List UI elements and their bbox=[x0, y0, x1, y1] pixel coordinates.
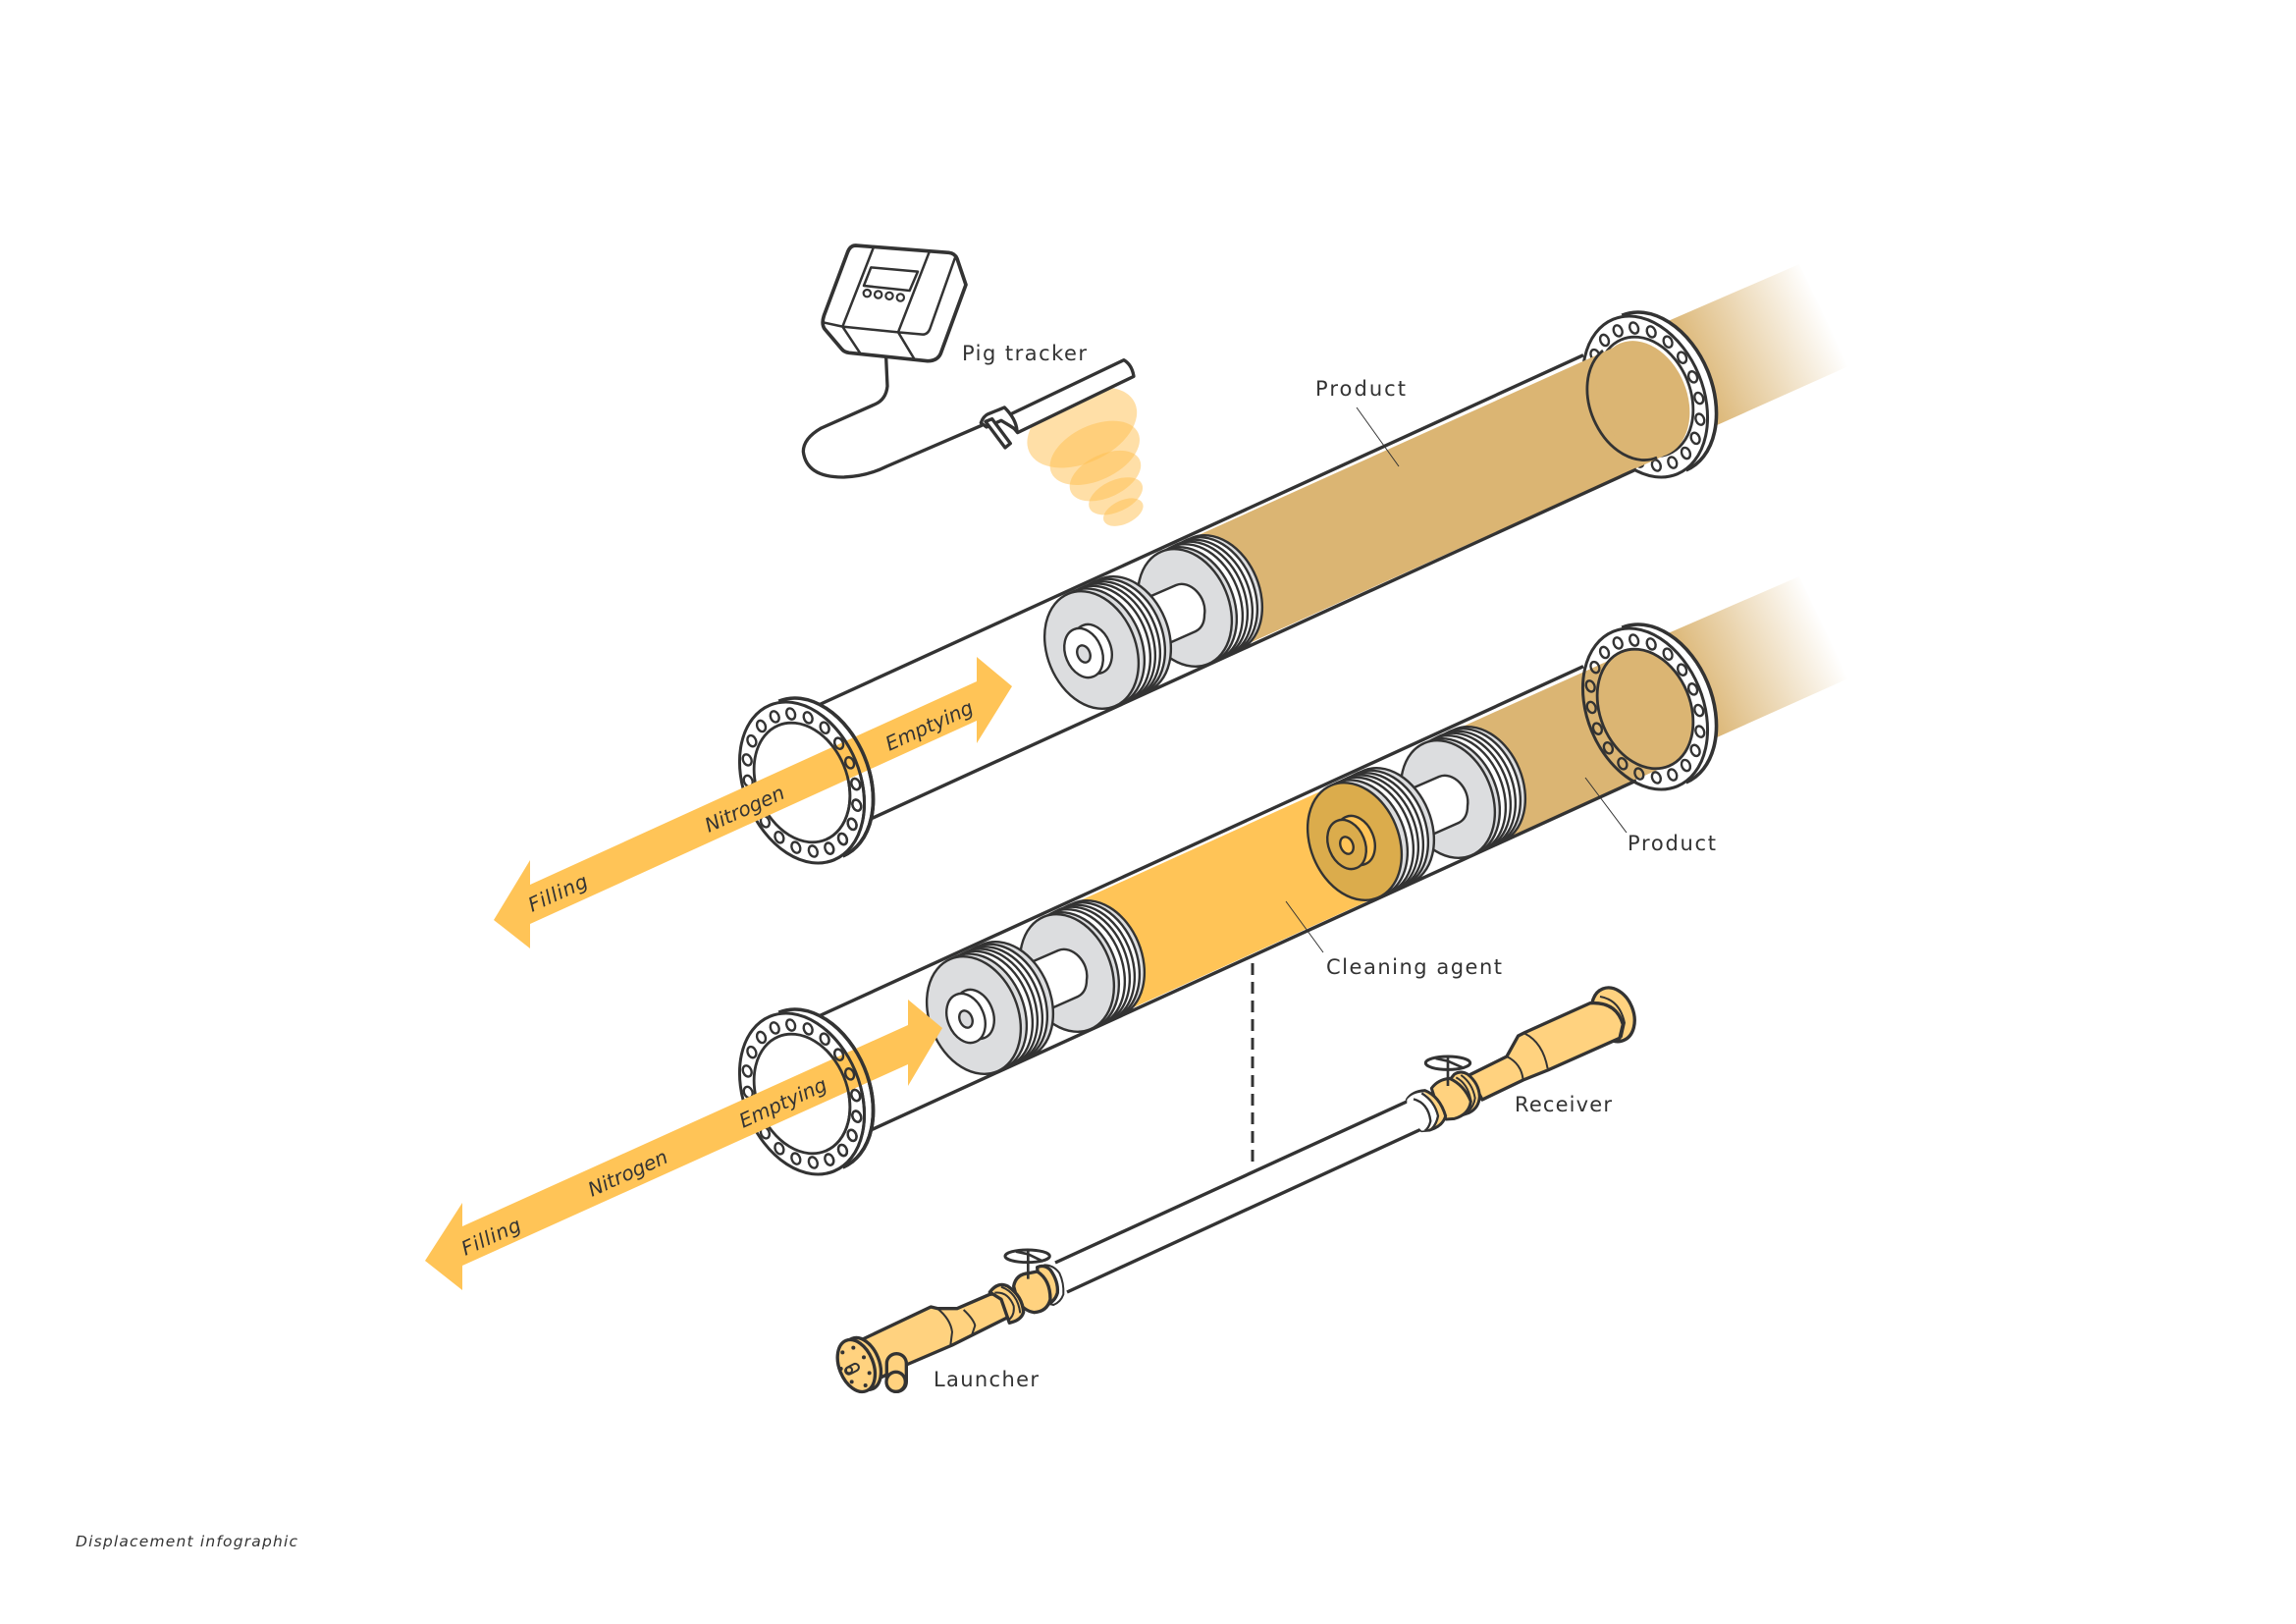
receiver bbox=[1469, 981, 1642, 1100]
lower pipe assembly bbox=[425, 576, 1848, 1290]
lower pig left bbox=[910, 886, 1161, 1089]
pig tracker device bbox=[803, 245, 1149, 532]
upper arrow: Filling, Nitrogen, Emptying: Filling bbox=[524, 869, 591, 917]
upper pig bbox=[1028, 520, 1279, 724]
label: Pig tracker: Pig tracker bbox=[962, 342, 1087, 365]
label: Product lower: Product bbox=[1628, 832, 1716, 855]
caption: Displacement infographic bbox=[76, 1533, 297, 1550]
launcher bbox=[830, 1250, 1063, 1397]
dashed connector bbox=[1251, 963, 1255, 1168]
label: Product upper: Product bbox=[1315, 377, 1406, 401]
lower left flange bbox=[717, 991, 896, 1193]
lower arrow: Filling, Nitrogen, Emptying bbox=[425, 1000, 942, 1290]
receiver valve body bbox=[1431, 1078, 1470, 1119]
lower pipe walls bbox=[820, 667, 1636, 1130]
label: Cleaning agent bbox=[1286, 901, 1502, 979]
receiver seams bbox=[1507, 997, 1625, 1080]
upper pipe assembly bbox=[494, 264, 1848, 948]
upper product strip fading behind flange bbox=[1629, 264, 1848, 447]
pipeline overview walls bbox=[1055, 1102, 1421, 1292]
lower arrow: Filling, Nitrogen, Emptying: Filling bbox=[457, 1213, 524, 1261]
lower arrow: Filling, Nitrogen, Emptying: Nitrogen bbox=[584, 1145, 671, 1202]
label: Product lower bbox=[1585, 778, 1716, 855]
cleaning agent fill bbox=[1072, 787, 1380, 1012]
label: Product upper bbox=[1315, 377, 1406, 466]
lower pipe end fill bbox=[1579, 634, 1711, 784]
label: Launcher: Launcher bbox=[934, 1368, 1039, 1391]
lower product fill bbox=[1454, 654, 1675, 839]
launcher end plate bbox=[830, 1332, 888, 1397]
tracker box bbox=[823, 245, 966, 361]
upper arrow: Filling, Nitrogen, Emptying bbox=[494, 657, 1012, 948]
upper pipe end opening bbox=[1579, 327, 1707, 471]
lower arrow: Filling, Nitrogen, Emptying: Emptying bbox=[735, 1072, 830, 1133]
lower left flange front edge over arrow bbox=[827, 1017, 876, 1175]
label: Cleaning agent: Cleaning agent bbox=[1326, 955, 1502, 979]
upper arrow: Filling, Nitrogen, Emptying: Emptying bbox=[881, 695, 977, 756]
upper pipe walls bbox=[820, 355, 1636, 819]
receiver valve flange bbox=[1450, 1072, 1479, 1116]
receiver handwheel bbox=[1425, 1056, 1470, 1086]
upper left flange bbox=[717, 679, 896, 882]
lower right flange bbox=[1560, 610, 1731, 808]
receiver end flange bbox=[1584, 981, 1642, 1048]
upper arrow: Filling, Nitrogen, Emptying: Nitrogen bbox=[701, 781, 788, 838]
launcher reducer seams bbox=[937, 1309, 975, 1345]
sound waves bbox=[1014, 371, 1149, 532]
launcher mid flange bbox=[989, 1284, 1024, 1323]
receiver pipe flange bbox=[1407, 1091, 1446, 1131]
receiver body bbox=[1469, 1003, 1623, 1100]
receiver valve and pipe flange bbox=[1407, 1056, 1479, 1131]
upper left flange front edge over arrow bbox=[827, 707, 876, 864]
probe bbox=[981, 360, 1134, 448]
launcher handwheel bbox=[1005, 1250, 1049, 1279]
lower right flange backing bbox=[1560, 606, 1739, 808]
lower product strip fading behind flange bbox=[1629, 576, 1848, 759]
tracker cable bbox=[803, 357, 982, 477]
lower pig right with coloured face bbox=[1291, 712, 1542, 915]
launcher white pipe flange bbox=[1043, 1265, 1063, 1305]
upper right flange bbox=[1560, 294, 1739, 496]
upper product fill bbox=[1190, 346, 1669, 647]
launcher side branch bbox=[886, 1354, 906, 1391]
label: Receiver: Receiver bbox=[1515, 1093, 1612, 1116]
launcher body bbox=[861, 1293, 1014, 1381]
launcher valve flange and body bbox=[1014, 1266, 1057, 1313]
